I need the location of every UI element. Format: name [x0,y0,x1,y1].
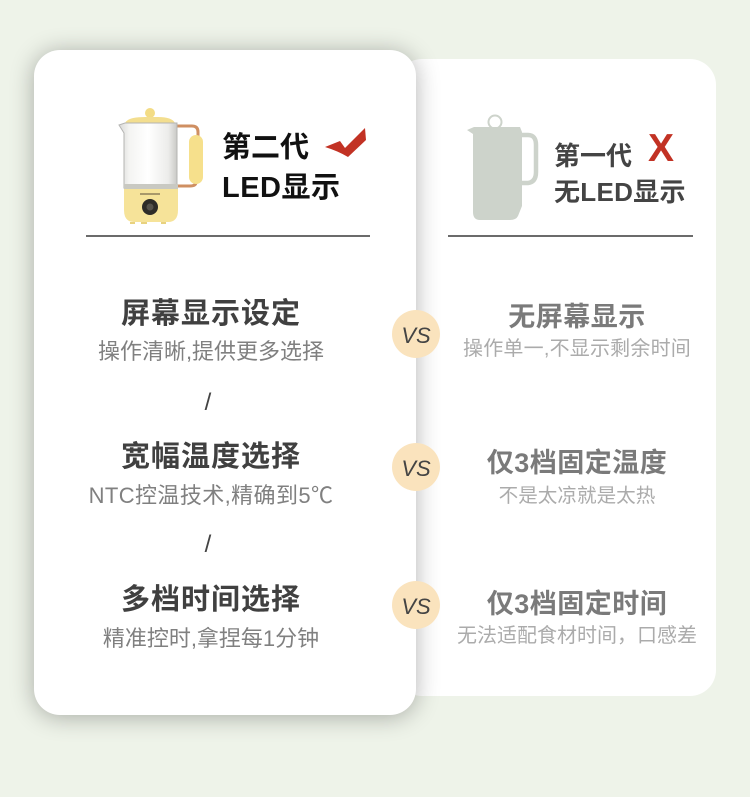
comparison 1 title: 无屏幕显示 [508,302,646,332]
VS badge 2: VS [401,456,431,481]
panel: second generation card [34,50,416,715]
heading: second generation: 第二代 [222,132,309,164]
comparison 3 title: 仅3档固定时间 [487,589,667,619]
comparison 3 description: 无法适配食材时间，口感差 [457,625,697,647]
feature 1 title: 屏幕显示设定 [121,298,301,330]
icon: red X: X [648,127,674,170]
VS badge 1 [392,310,440,358]
divider: left header rule [86,235,370,237]
icon: yellow kettle [118,108,203,224]
separator slash: / [205,531,211,558]
VS badge 3: VS [401,594,431,619]
VS badge 2 [392,443,440,491]
feature 2 title: 宽幅温度选择 [121,441,301,473]
icon: grey kettle silhouette [467,114,538,220]
comparison 2 title: 仅3档固定温度 [487,448,667,478]
comparison 2 description: 不是太凉就是太热 [499,485,655,507]
heading: no LED display: 无LED显示 [554,177,686,207]
heading: first generation: 第一代 [554,141,632,171]
VS badge 1: VS [401,323,431,348]
panel: first generation card [396,59,716,696]
feature 1 description: 操作清晰,提供更多选择 [98,339,324,364]
divider: right header rule [448,235,693,237]
comparison 1 description: 操作单一,不显示剩余时间 [463,338,691,360]
heading: LED display: LED显示 [222,172,341,204]
separator slash: / [205,389,211,416]
feature 3 title: 多档时间选择 [121,584,301,616]
feature 2 description: NTC控温技术,精确到5℃ [89,483,333,508]
feature 3 description: 精准控时,拿捏每1分钟 [103,626,319,651]
icon: red check mark [325,128,366,157]
VS badge 3 [392,581,440,629]
